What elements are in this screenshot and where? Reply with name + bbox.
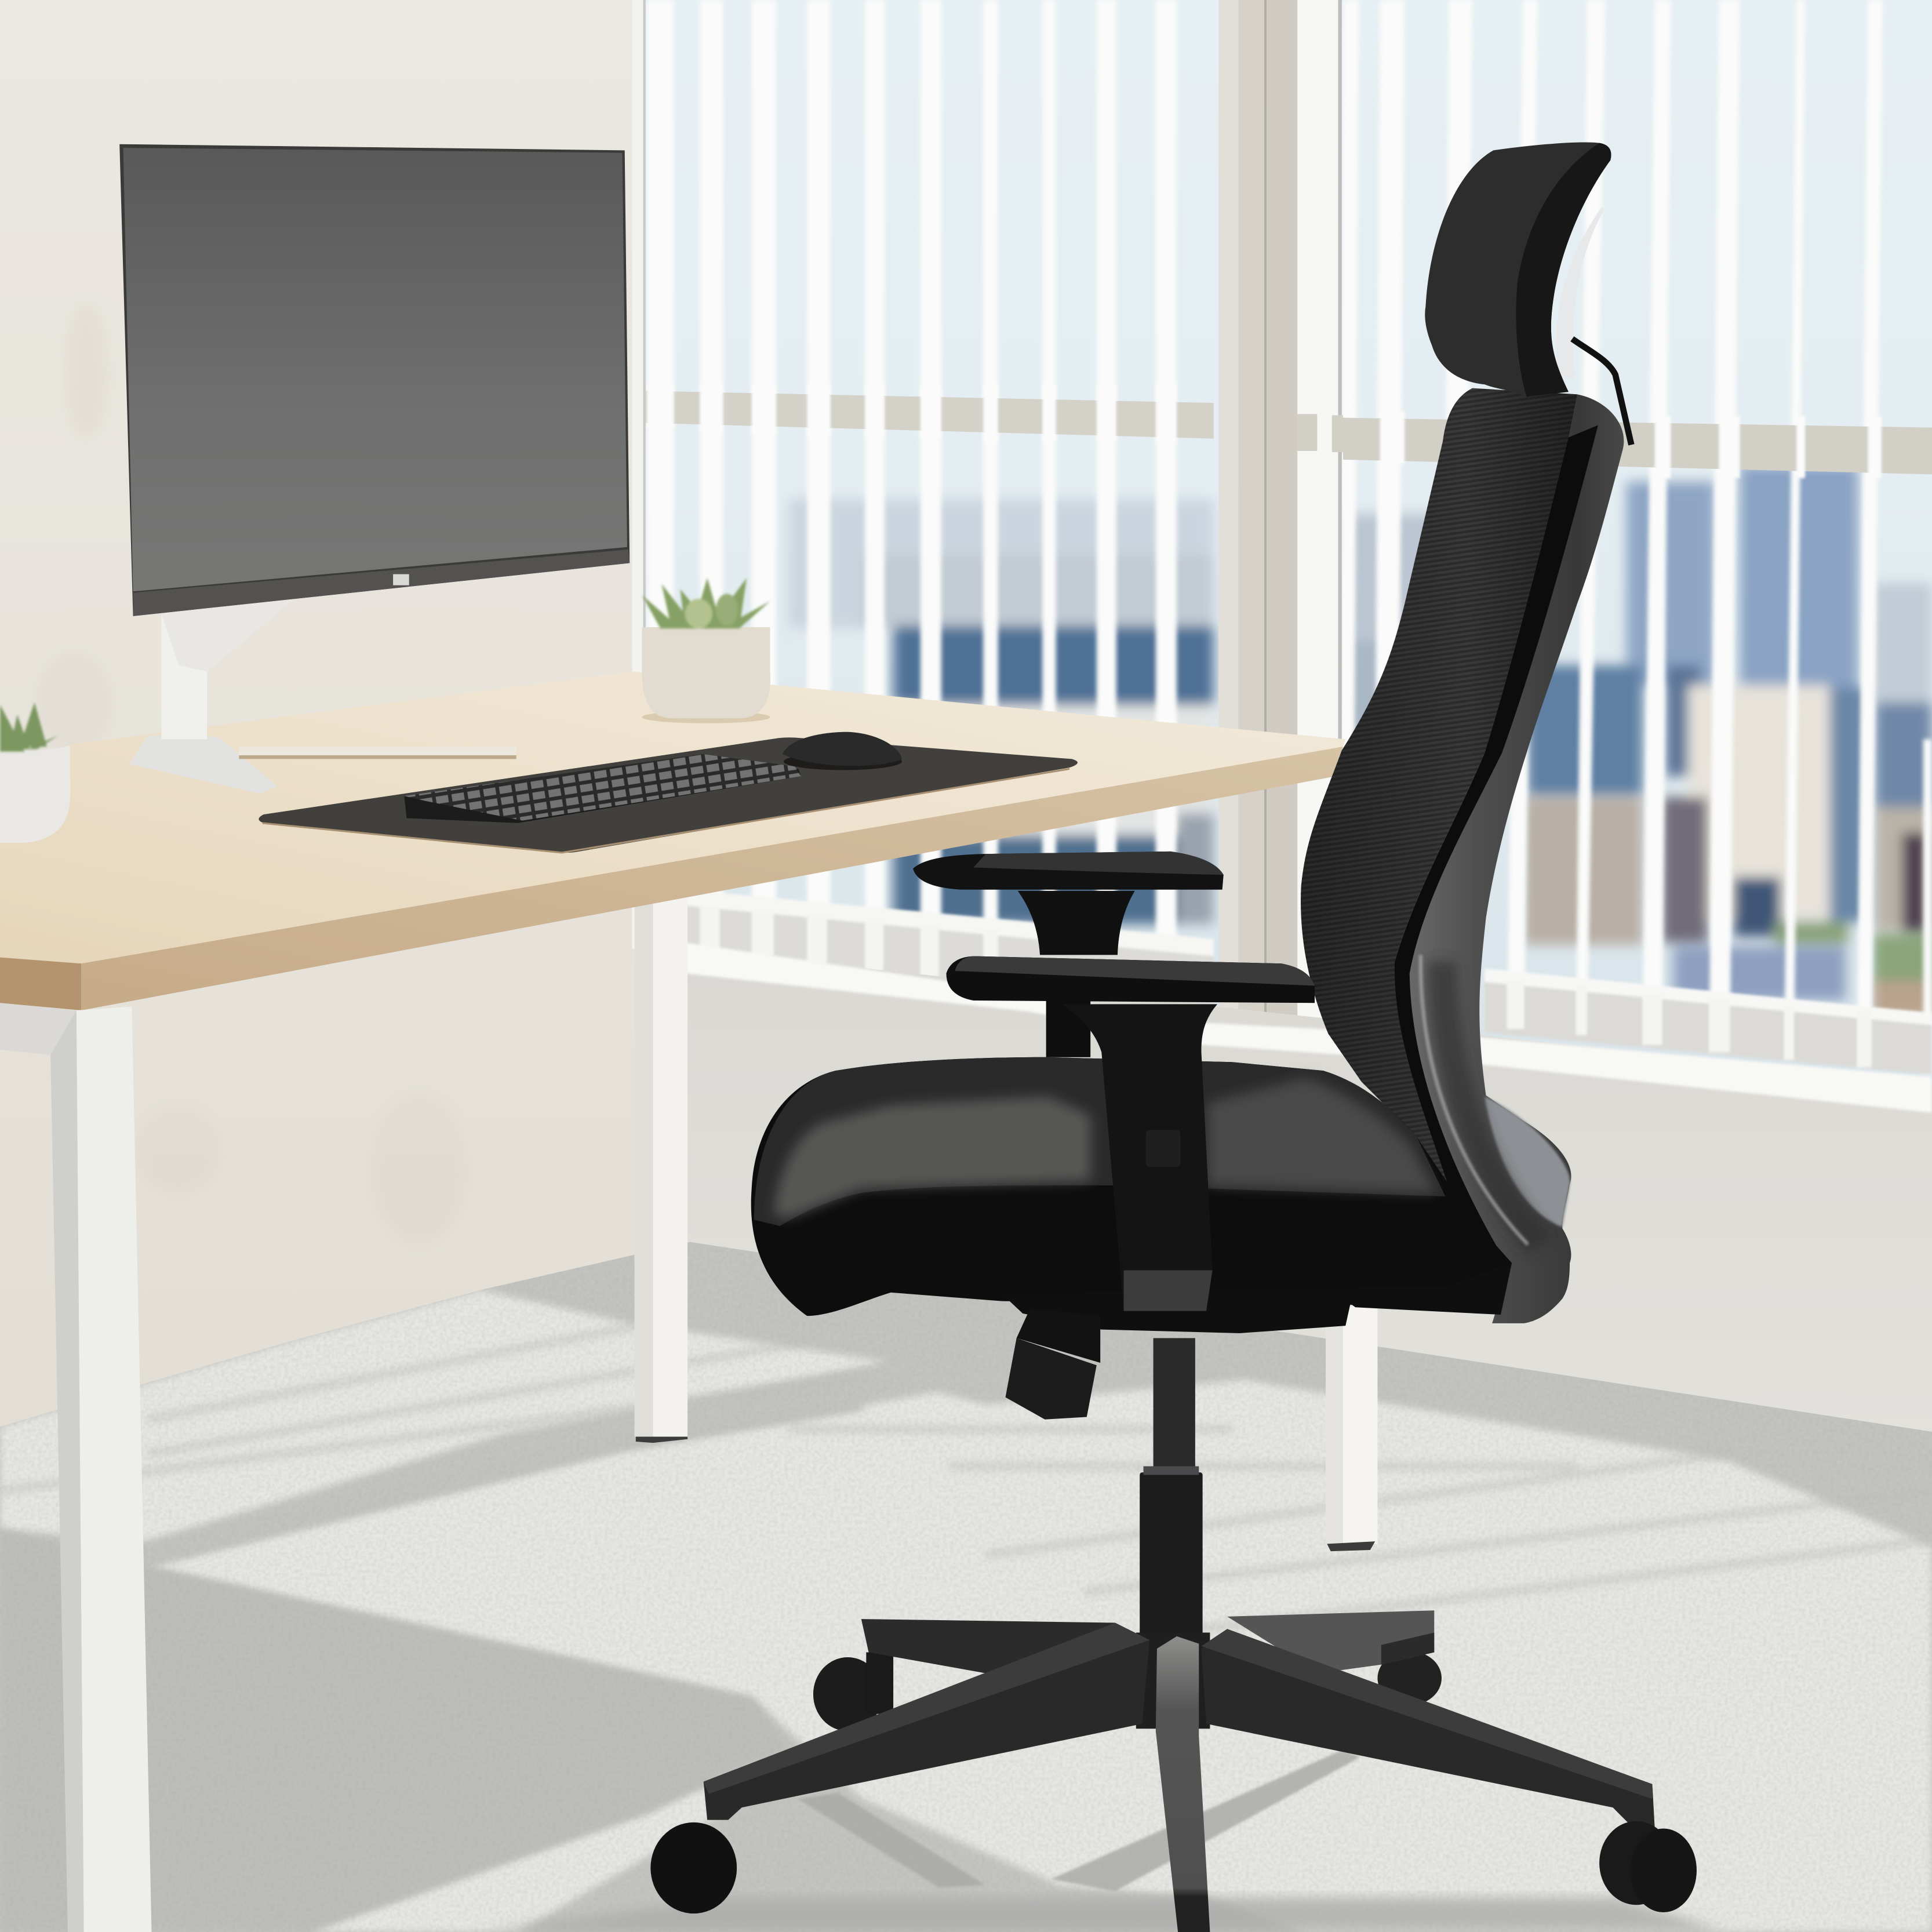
chair: mesh backrest xyxy=(1301,388,1598,1268)
chair: headrest xyxy=(1425,142,1631,445)
chair: height knob xyxy=(1006,1308,1100,1420)
monitor logo xyxy=(393,574,409,585)
chair: caster front left xyxy=(650,1822,737,1913)
chair: front armrest xyxy=(946,956,1315,1311)
window blinds: vertical slats xyxy=(647,0,1932,1075)
window sill and lower wall xyxy=(685,943,1932,1432)
chair: seat cushion xyxy=(751,1057,1512,1316)
desk: tabletop xyxy=(0,671,1345,1010)
window frame xyxy=(632,0,1343,1029)
potted plant: right xyxy=(642,578,770,723)
chair: caster rear left xyxy=(813,1652,893,1731)
wall: faint leaf pattern xyxy=(37,302,468,1245)
window: sky and blurred city xyxy=(635,0,1932,1085)
blinds: horizontal rail xyxy=(635,384,1932,478)
chair: caster front right xyxy=(1599,1821,1697,1912)
blinds: scalloped bottom edge xyxy=(685,890,1932,1075)
keyboard xyxy=(404,754,801,823)
desk: front leg xyxy=(0,1003,151,1932)
desk: rear leg xyxy=(635,897,687,1443)
chair xyxy=(650,142,1697,1932)
potted plant: left xyxy=(0,703,70,843)
chair: five-star base xyxy=(704,1610,1655,1932)
monitor xyxy=(119,144,630,616)
desk: right leg xyxy=(1326,1306,1377,1551)
mouse xyxy=(783,732,902,770)
chair: gas lift column xyxy=(1140,1338,1203,1639)
chair: seat mechanism xyxy=(1002,1263,1512,1333)
chair: caster rear right xyxy=(1377,1651,1442,1705)
monitor arm stand xyxy=(129,599,516,794)
chair: rear armrest xyxy=(913,852,1224,955)
carpet floor xyxy=(0,1242,1932,1932)
chair: back shell xyxy=(1395,394,1624,1323)
desk mat xyxy=(259,737,1078,853)
